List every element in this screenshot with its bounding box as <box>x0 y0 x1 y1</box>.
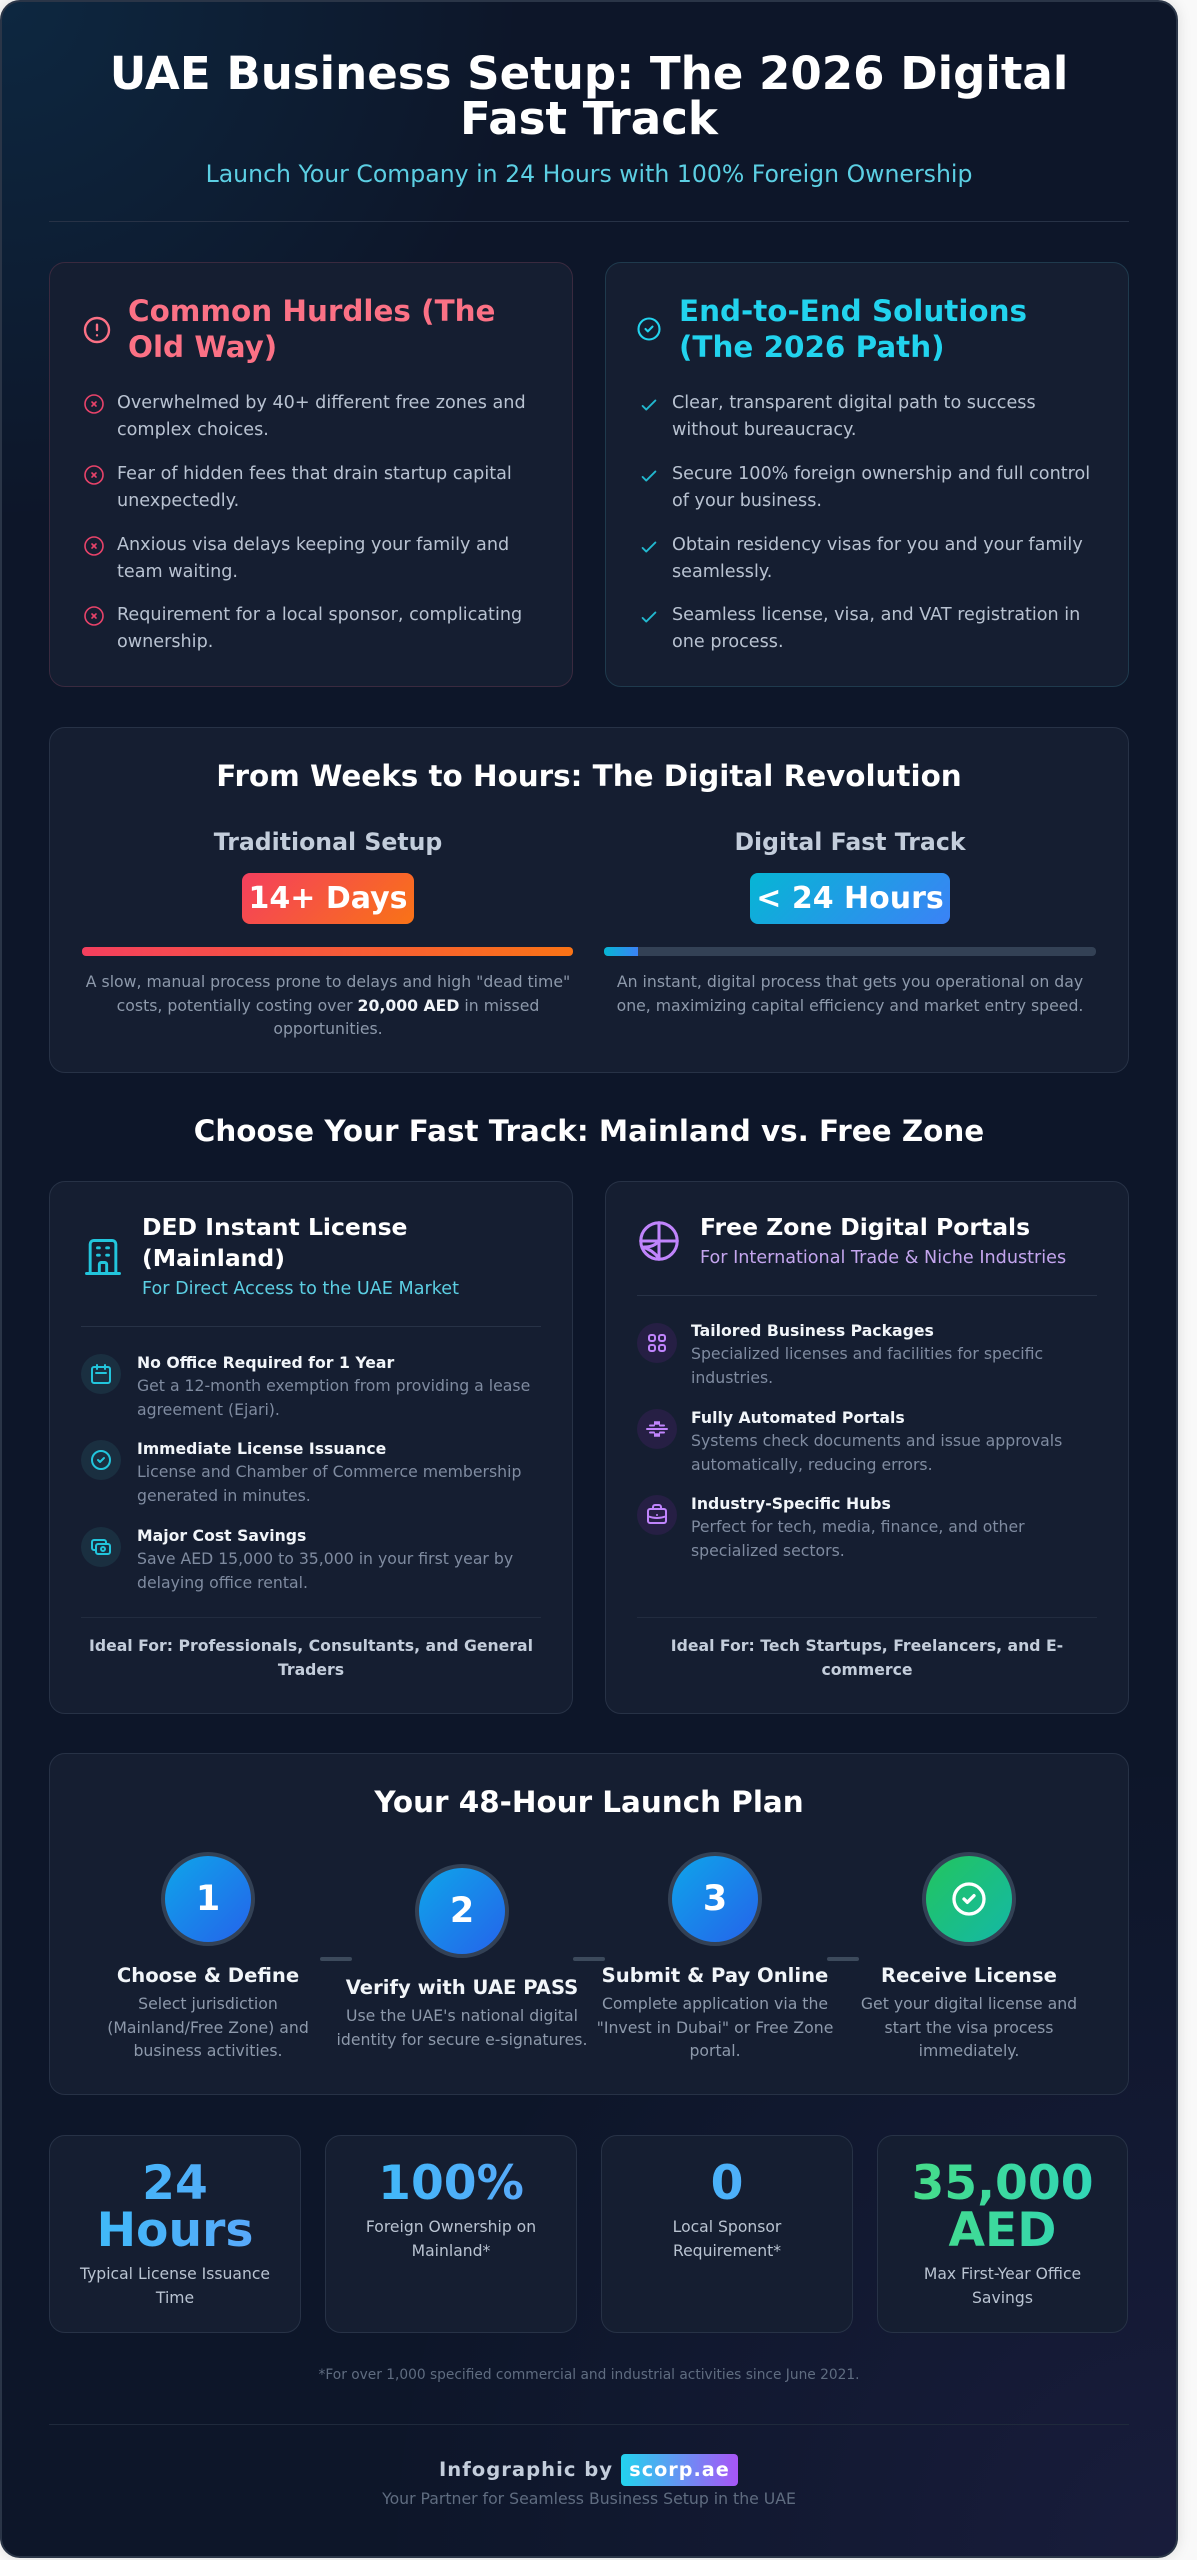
footer credit <box>439 2454 738 2486</box>
solution 3: Obtain residency visas for you and your family seamlessly. <box>672 535 1083 582</box>
label: traditional setup: Traditional Setup <box>214 828 442 856</box>
benefit: no office: No Office Required for 1 Year <box>137 1353 394 1372</box>
number badge 1: 1 <box>196 1879 220 1919</box>
panel: common hurdles <box>49 262 573 687</box>
step 2 text: Use the UAE's national digital identity for secure e-signatures. <box>337 2006 587 2049</box>
check badge <box>922 1852 1016 1946</box>
hurdle 1: Overwhelmed by 40+ different free zones and complex choices. <box>117 393 526 440</box>
card title: DED Instant License (Mainland) <box>142 1213 408 1272</box>
stat card: 100% <box>325 2135 577 2333</box>
step 3 title: Submit & Pay Online <box>602 1964 828 1987</box>
panel: 48-hour launch plan <box>49 1753 1129 2095</box>
hurdle 3: Anxious visa delays keeping your family and team waiting. <box>117 535 509 582</box>
solution 2: Secure 100% foreign ownership and full control of your business. <box>672 464 1090 511</box>
step 3 <box>597 1852 833 2060</box>
number badge 1 <box>161 1852 255 1946</box>
description: An instant, digital process that gets you operational on day one, maximizing capital efficiency and market entry speed. <box>617 972 1083 1015</box>
connector <box>573 1957 605 1961</box>
stat value: 100% <box>378 2156 524 2211</box>
icon: exclamation circle <box>84 316 110 344</box>
benefit: automated portals: Fully Automated Portals <box>691 1408 905 1427</box>
ideal for: Ideal For: Professionals, Consultants, and General Traders <box>89 1636 533 1679</box>
benefit: industry hubs: Perfect for tech, media, finance, and other specialized sectors. <box>691 1517 1025 1560</box>
number badge 2: 2 <box>450 1891 474 1931</box>
step 3 text: Complete application via the "Invest in Dubai" or Free Zone portal. <box>597 1994 833 2060</box>
stat value <box>50 2160 300 2254</box>
stat card: 35,000 AED <box>877 2135 1128 2333</box>
stat value <box>878 2160 1127 2254</box>
subtitle: Launch Your Company in 24 Hours with 100% Foreign Ownership <box>206 160 972 188</box>
column: digital fast track <box>604 828 1096 1015</box>
benefit: cost savings <box>81 1526 513 1592</box>
stat value <box>326 2160 576 2207</box>
ideal for: Ideal For: Tech Startups, Freelancers, and E- commerce <box>671 1636 1063 1679</box>
hurdle list <box>84 393 526 652</box>
stat label: Max First-Year Office Savings <box>924 2265 1081 2307</box>
connector <box>320 1957 352 1961</box>
heading: choose your fast track: Choose Your Fast Track: Mainland vs. Free Zone <box>194 1114 984 1148</box>
card subtitle: For International Trade & Niche Industries <box>700 1248 1066 1268</box>
badge: under 24 hours <box>750 873 950 924</box>
step 2 title: Verify with UAE PASS <box>346 1976 578 1999</box>
heading: solutions: End-to-End Solutions (The 2026 Path) <box>679 294 1027 364</box>
solution list <box>642 393 1090 652</box>
hurdle 4: Requirement for a local sponsor, complicating ownership. <box>117 605 522 652</box>
icon: globe <box>639 1221 679 1261</box>
benefit: automated portals: Systems check documents and issue approvals automatically, reducing errors. <box>691 1431 1062 1474</box>
step 1 text: Select jurisdiction (Mainland/Free Zone) and business activities. <box>107 1994 309 2060</box>
progress bar: 7% <box>604 947 1096 956</box>
connector <box>827 1957 859 1961</box>
footer tagline: Your Partner for Seamless Business Setup in the UAE <box>382 2489 796 2508</box>
column: traditional setup <box>82 828 573 1038</box>
progress bar: full <box>82 947 573 956</box>
number badge 3 <box>668 1852 762 1946</box>
benefit: cost savings: Major Cost Savings <box>137 1526 306 1545</box>
step 2 <box>337 1864 587 2049</box>
solution 1: Clear, transparent digital path to success without bureaucracy. <box>672 393 1036 440</box>
panel: free zone digital portals <box>605 1181 1129 1714</box>
stat value: 24 Hours <box>97 2156 253 2258</box>
icon: building <box>85 1239 121 1275</box>
card title: Free Zone Digital Portals <box>700 1213 1030 1241</box>
benefit: no office: Get a 12-month exemption from providing a lease agreement (Ejari). <box>137 1376 530 1419</box>
badge: 14+ days <box>242 873 414 924</box>
panel: end-to-end solutions <box>605 262 1129 687</box>
stat value <box>602 2160 852 2207</box>
benefit: cost savings: Save AED 15,000 to 35,000 in your first year by delaying office rental. <box>137 1549 513 1592</box>
stat label: Typical License Issuance Time <box>80 2265 270 2307</box>
benefit: no office <box>81 1353 530 1419</box>
step 4 title: Receive License <box>881 1964 1057 1987</box>
benefit: tailored packages <box>637 1321 1043 1387</box>
step 4 <box>861 1852 1077 2060</box>
benefit: tailored packages: Specialized licenses and facilities for specific industries. <box>691 1344 1043 1387</box>
benefit: immediate issuance <box>81 1439 521 1505</box>
brand badge <box>621 2454 738 2486</box>
card subtitle: For Direct Access to the UAE Market <box>142 1279 459 1299</box>
title: UAE Business Setup: The 2026 Digital Fast Track <box>110 47 1068 145</box>
benefit: automated portals <box>637 1408 1062 1474</box>
number badge 2 <box>415 1864 509 1958</box>
stat card: 24 hours <box>49 2135 301 2333</box>
stat card: 0 <box>601 2135 853 2333</box>
badge: under 24 hours: < 24 Hours <box>756 881 944 916</box>
step 1 title: Choose & Define <box>117 1964 299 1987</box>
badge: 14+ days: 14+ Days <box>249 881 407 916</box>
step 1 <box>107 1852 309 2060</box>
panel: DED instant license <box>49 1181 573 1714</box>
benefit: immediate issuance: Immediate License Issuance <box>137 1439 386 1458</box>
benefit: industry hubs: Industry-Specific Hubs <box>691 1494 891 1513</box>
stat value: 0 <box>711 2156 743 2211</box>
benefit: tailored packages: Tailored Business Packages <box>691 1321 934 1340</box>
footer label: Infographic by <box>439 2458 613 2481</box>
footnote: *For over 1,000 specified commercial and industrial activities since June 2021. <box>318 2367 860 2383</box>
stat label: Foreign Ownership on Mainland* <box>366 2218 536 2260</box>
heading: from weeks to hours: From Weeks to Hours: The Digital Revolution <box>216 759 962 793</box>
hurdle 2: Fear of hidden fees that drain startup capital unexpectedly. <box>117 464 512 511</box>
number badge 3: 3 <box>703 1879 727 1919</box>
stat value: 35,000 AED <box>911 2156 1094 2258</box>
benefit: immediate issuance: License and Chamber of Commerce membership generated in minutes. <box>137 1462 521 1505</box>
heading: launch plan: Your 48-Hour Launch Plan <box>374 1785 804 1819</box>
description: A slow, manual process prone to delays and high "dead time" costs, potentially costing over 20,000 AED in missed opportunities. <box>86 972 570 1038</box>
panel: digital revolution comparison <box>49 727 1129 1073</box>
benefit: industry hubs <box>637 1494 1025 1560</box>
icon: check circle <box>637 318 661 340</box>
solution 4: Seamless license, visa, and VAT registration in one process. <box>672 605 1080 652</box>
brand badge: scorp.ae <box>629 2458 730 2481</box>
step 4 text: Get your digital license and start the visa process immediately. <box>861 1994 1077 2060</box>
label: digital fast track: Digital Fast Track <box>734 828 966 856</box>
stat label: Local Sponsor Requirement* <box>673 2218 781 2260</box>
heading: common hurdles: Common Hurdles (The Old Way) <box>128 294 495 364</box>
